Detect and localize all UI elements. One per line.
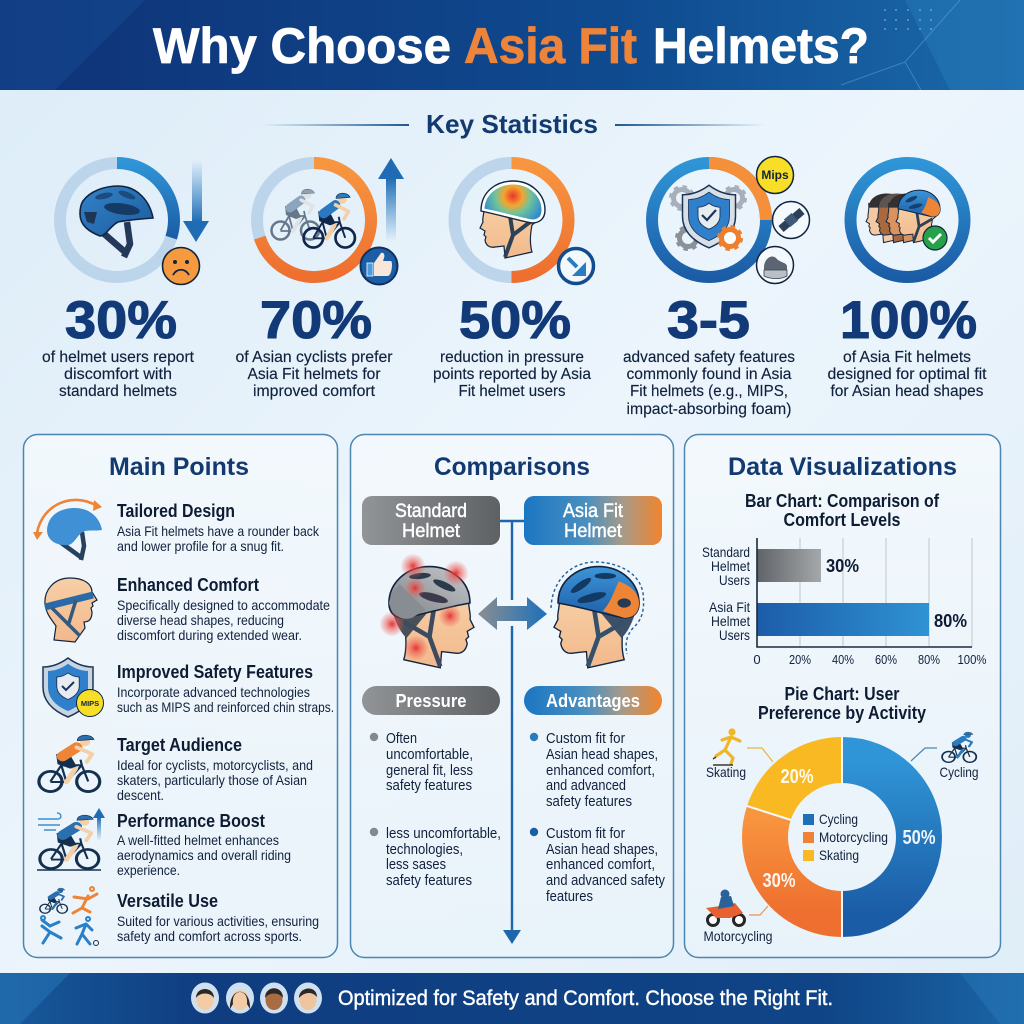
bar: standard helmet users <box>757 549 859 582</box>
icon: thumbs up <box>360 248 398 284</box>
arrow: up <box>378 158 404 242</box>
column header: asia fit helmet <box>524 496 662 545</box>
point: versatile use: Suited for various activities, ensuring <box>117 913 319 929</box>
point: target audience: descent. <box>117 787 164 803</box>
list: asia fit second point: and advanced safety <box>546 872 665 889</box>
bar: asia fit helmet users: 80% <box>934 611 967 631</box>
list: standard helmet first point: Often <box>386 730 417 747</box>
pie chart title <box>758 684 926 723</box>
label: pressure: Pressure <box>396 691 466 711</box>
description <box>433 349 591 400</box>
title: Asia Fit <box>464 18 637 74</box>
section heading: key statistics: Key Statistics <box>426 109 598 139</box>
point: target audience: skaters, particularly those of Asian <box>117 772 307 788</box>
description: improved comfort <box>253 383 376 400</box>
segment: motorcycling 30%: 30% <box>762 870 796 892</box>
description <box>623 349 795 418</box>
segment: skating 20%: 20% <box>780 766 814 788</box>
description <box>236 349 393 400</box>
point: enhanced comfort <box>45 575 330 643</box>
callout: skating: Skating <box>706 764 746 780</box>
icon: shield with MIPS badge <box>43 658 104 717</box>
icon: Mips badge: Mips <box>761 168 789 182</box>
point: performance boost: experience. <box>117 862 180 878</box>
bar chart: 0 <box>753 652 761 667</box>
arrow: two-way comparison <box>478 597 547 630</box>
segment: cycling 50% <box>842 760 936 914</box>
list: standard helmet first point <box>370 730 473 794</box>
list: asia fit first point <box>530 730 658 810</box>
header banner <box>0 0 1024 90</box>
panel: data visualizations <box>684 434 1000 958</box>
list: asia fit first point: Asian head shapes, <box>546 746 658 763</box>
bar chart: Helmet <box>711 558 750 574</box>
point: performance boost: aerodynamics and overall riding <box>117 847 291 863</box>
icon: green check <box>923 226 947 250</box>
bar chart: 20% <box>789 652 811 667</box>
point: tailored design <box>33 500 320 560</box>
description: of Asian cyclists prefer <box>236 349 393 366</box>
list: asia fit second point <box>530 825 665 905</box>
list: standard helmet second point: safety features <box>386 872 472 889</box>
value: 70% <box>260 291 372 350</box>
column header: asia fit helmet: Asia Fit <box>563 501 624 522</box>
segment: skating 20% <box>769 760 842 813</box>
point: versatile use <box>40 887 319 946</box>
panel: comparisons <box>350 434 674 958</box>
label: pressure <box>362 686 500 715</box>
heading: main points: Main Points <box>109 453 249 481</box>
title <box>153 18 869 74</box>
stat: 70% <box>236 158 404 400</box>
icon: Mips badge <box>756 156 794 194</box>
point: tailored design: Asia Fit helmets have a rounder back <box>117 523 320 539</box>
icon: shield with MIPS badge: MIPS <box>81 699 99 708</box>
bar chart <box>702 538 987 667</box>
column header: standard helmet: Standard <box>395 501 467 522</box>
description: advanced safety features <box>623 349 795 366</box>
list: asia fit second point: Custom fit for <box>546 825 625 842</box>
icon: helmet <box>80 186 153 257</box>
description: Fit helmet users <box>458 383 566 400</box>
bar chart: Standard <box>702 544 750 560</box>
value: 100% <box>840 291 977 350</box>
description: of Asia Fit helmets <box>843 349 971 366</box>
point: enhanced comfort: Specifically designed to accommodate <box>117 597 330 613</box>
point: target audience: Target Audience <box>117 735 242 755</box>
list: standard helmet first point: general fit, less <box>386 762 473 779</box>
pie chart title: Pie Chart: User <box>784 684 900 704</box>
description: impact-absorbing foam) <box>626 401 792 418</box>
callout: skating <box>706 728 773 780</box>
bar chart: 40% <box>832 652 854 667</box>
stat: 3-5 <box>623 156 810 418</box>
callout: cycling <box>911 732 978 780</box>
list: standard helmet second point: less sases <box>386 856 446 873</box>
point: enhanced comfort: discomfort during extended wear. <box>117 627 302 643</box>
point: enhanced comfort: Enhanced Comfort <box>117 575 259 595</box>
point: improved safety features: such as MIPS and reinforced chin straps. <box>117 699 334 715</box>
point: versatile use: safety and comfort across sports. <box>117 928 302 944</box>
arrow: down <box>183 160 209 242</box>
value: 50% <box>459 291 571 350</box>
bar chart: 100% <box>958 652 987 667</box>
icon: sad face <box>162 248 200 284</box>
point: target audience <box>39 735 313 803</box>
point: target audience: Ideal for cyclists, motorcyclists, and <box>117 757 313 773</box>
list: standard helmet second point: less uncomfortable, <box>386 825 501 842</box>
description: designed for optimal fit <box>828 366 987 383</box>
icon: shield with gears <box>671 185 745 249</box>
segment: cycling 50%: 50% <box>902 827 936 849</box>
icon: cyclist <box>39 735 100 792</box>
callout: cycling: Cycling <box>940 764 978 780</box>
list: standard helmet first point: safety features <box>386 777 472 794</box>
segment: motorcycling 30% <box>762 813 842 914</box>
description: of helmet users report <box>42 349 195 366</box>
description <box>42 349 195 400</box>
list: asia fit first point: enhanced comfort, <box>546 762 655 779</box>
value: 30% <box>65 291 177 350</box>
heading: comparisons: Comparisons <box>434 453 590 481</box>
point: performance boost <box>37 808 291 878</box>
icon: diverse heads with helmet <box>866 190 940 243</box>
description: commonly found in Asia <box>626 366 792 383</box>
icon: fast cyclist <box>37 808 105 870</box>
callout: motorcycling: Motorcycling <box>704 928 772 944</box>
callout: motorcycling <box>704 890 772 944</box>
bar chart: Users <box>719 572 750 588</box>
icon: four sports figures <box>40 887 98 946</box>
bar chart title: Comfort Levels <box>784 510 900 530</box>
point: improved safety features: Improved Safety Features <box>117 662 313 682</box>
label: advantages: Advantages <box>546 691 640 711</box>
description: standard helmets <box>59 383 177 400</box>
pie chart title: Preference by Activity <box>758 703 926 723</box>
legend: Motorcycling <box>819 829 888 845</box>
description: reduction in pressure <box>440 349 584 366</box>
list: asia fit second point: features <box>546 888 593 905</box>
column header: asia fit helmet: Helmet <box>564 521 623 542</box>
title: Why Choose <box>153 18 451 74</box>
description: for Asian head shapes <box>830 383 984 400</box>
list: asia fit first point: safety features <box>546 793 632 810</box>
illustration: asia fit helmet on head <box>551 562 644 668</box>
footer banner <box>0 973 1024 1024</box>
column header: standard helmet: Helmet <box>402 521 461 542</box>
bar chart title: Bar Chart: Comparison of <box>745 491 940 511</box>
bar: standard helmet users: 30% <box>826 556 859 576</box>
description <box>828 349 987 400</box>
description: discomfort with <box>64 366 172 383</box>
heading: data visualizations: Data Visualizations <box>728 453 957 481</box>
center divider line with arrow <box>500 521 524 944</box>
legend <box>803 811 888 863</box>
bar: asia fit helmet users <box>757 603 967 636</box>
list: asia fit second point: enhanced comfort, <box>546 856 655 873</box>
description: Asia Fit helmets for <box>248 366 381 383</box>
icon: helmet with arc arrow <box>33 500 102 560</box>
point: performance boost: A well-fitted helmet enhances <box>117 832 279 848</box>
list: asia fit second point: Asian head shapes, <box>546 841 658 858</box>
bar chart: 80% <box>918 652 940 667</box>
column header: standard helmet <box>362 496 500 545</box>
point: tailored design: Tailored Design <box>117 501 235 521</box>
icon: decrease arrow badge <box>558 248 594 284</box>
bar chart: Asia Fit <box>709 599 750 615</box>
label: advantages <box>524 686 662 715</box>
list: asia fit first point: and advanced <box>546 777 626 794</box>
point: versatile use: Versatile Use <box>117 891 218 911</box>
icon: head with pressure heat map helmet <box>480 181 545 258</box>
title: Helmets? <box>653 18 869 74</box>
list: standard helmet second point <box>370 825 501 889</box>
bar chart: Helmet <box>711 613 750 629</box>
list: standard helmet first point: uncomfortable, <box>386 746 473 763</box>
point: performance boost: Performance Boost <box>117 811 265 831</box>
list: standard helmet second point: technologies, <box>386 841 463 858</box>
footer message: Optimized for Safety and Comfort. Choose the Right Fit. <box>338 987 833 1010</box>
icon: chin strap badge <box>772 202 810 238</box>
point: enhanced comfort: diverse head shapes, reducing <box>117 612 284 628</box>
icon: four diverse faces <box>191 982 322 1014</box>
bar chart: 60% <box>875 652 897 667</box>
stat: 100% <box>828 163 987 400</box>
bar chart: Users <box>719 627 750 643</box>
list: asia fit first point: Custom fit for <box>546 730 625 747</box>
legend: Cycling <box>819 811 858 827</box>
description: Fit helmets (e.g., MIPS, <box>630 383 788 400</box>
bar chart title <box>745 491 940 530</box>
point: improved safety features <box>43 658 334 717</box>
description: points reported by Asia <box>433 366 591 383</box>
stat: 30% <box>42 160 209 400</box>
icon: head with strap <box>45 578 97 642</box>
stat: 50% <box>433 163 594 400</box>
donut chart <box>747 736 936 938</box>
value: 3-5 <box>667 291 750 350</box>
point: improved safety features: Incorporate advanced technologies <box>117 684 310 700</box>
icon: cyclists <box>272 189 355 248</box>
illustration: standard helmet on head with pressure points <box>380 554 474 668</box>
icon: foam badge <box>756 246 794 284</box>
point: tailored design: and lower profile for a snug fit. <box>117 538 284 554</box>
legend: Skating <box>819 847 859 863</box>
panel: main points <box>24 434 338 958</box>
